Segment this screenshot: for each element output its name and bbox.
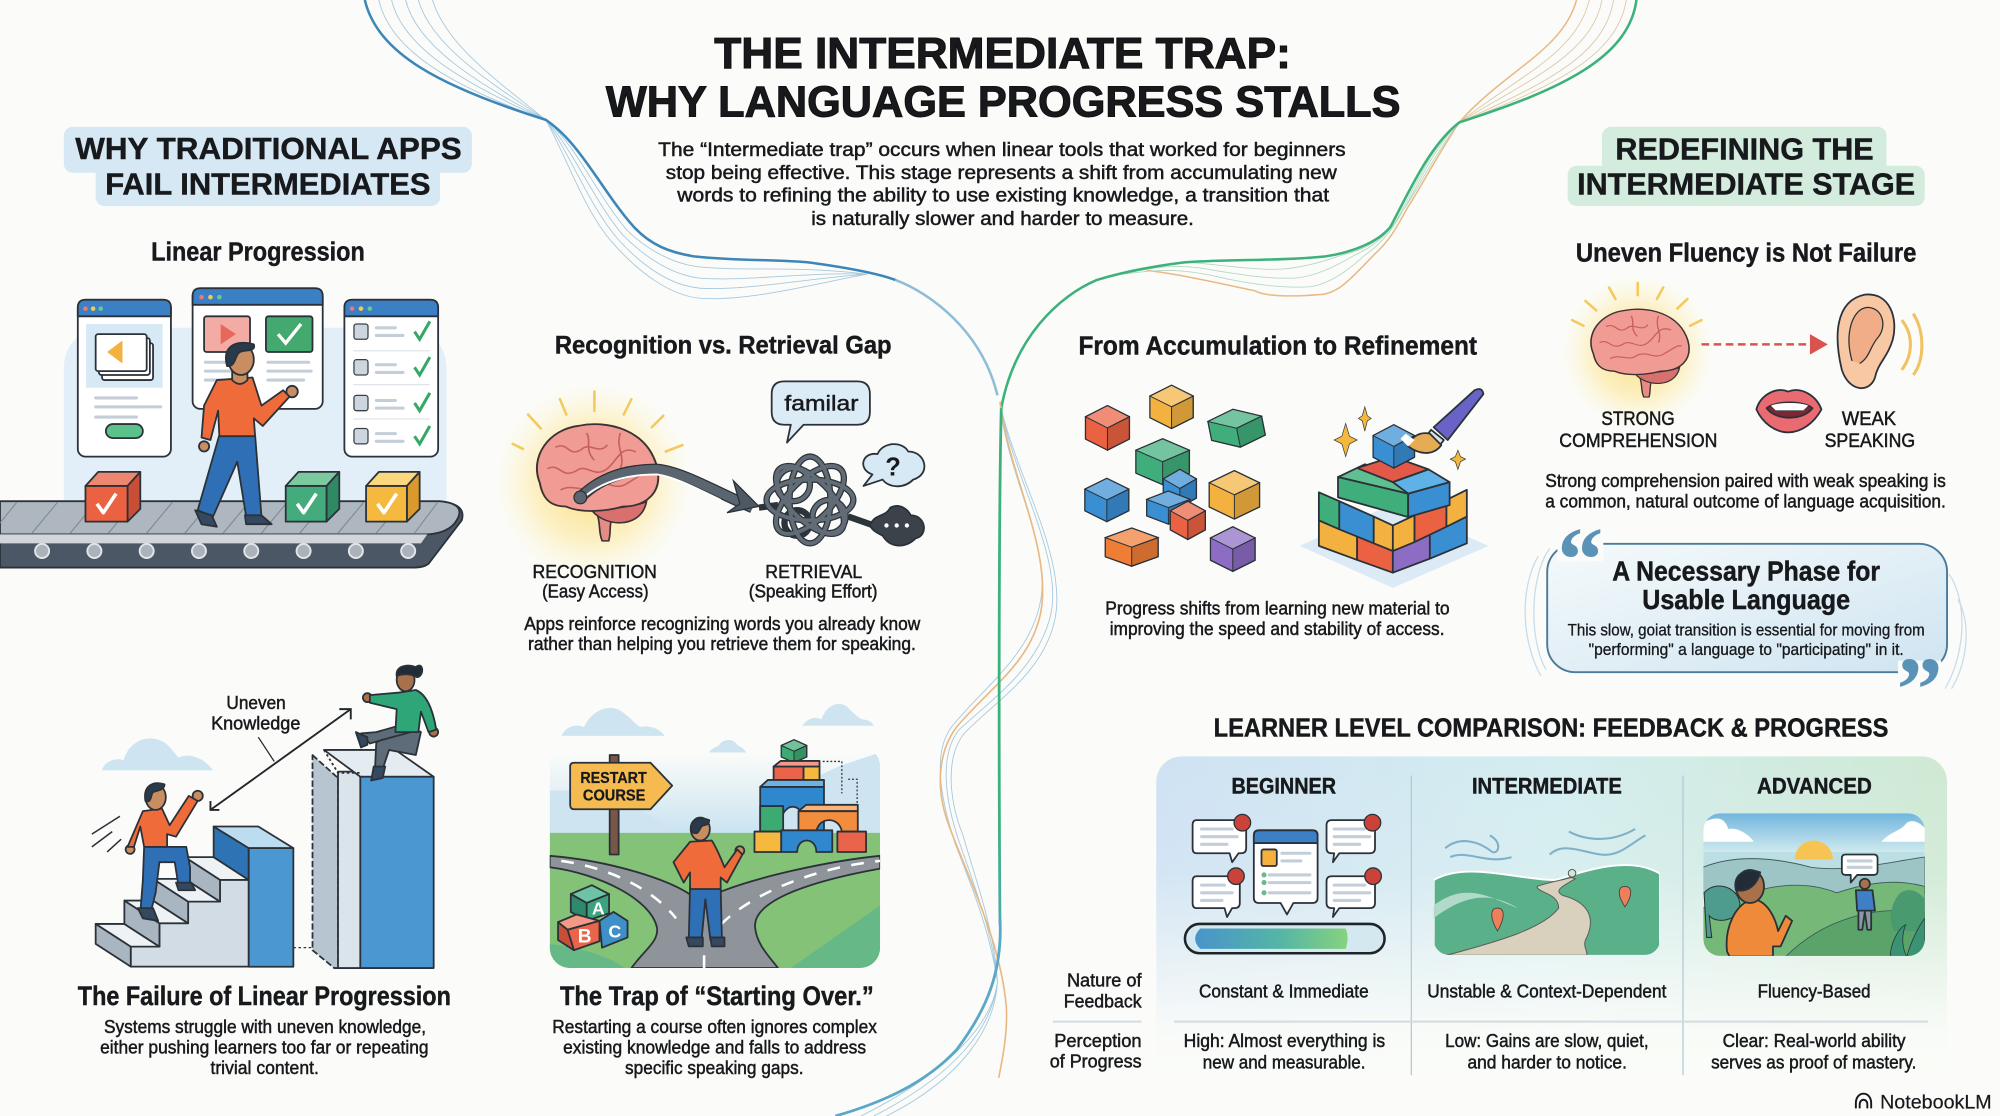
text: failure explanation: either pushing learners too far or repeating (100, 1037, 429, 1058)
label: uneven knowledge: Uneven (226, 692, 286, 713)
column headers: INTERMEDIATE (1472, 773, 1622, 798)
tall blue column (312, 750, 434, 968)
heading: learner level comparison: LEARNER LEVEL COMPARISON: FEEDBACK & PROGRESS (1214, 713, 1888, 743)
arrow: uneven knowledge (210, 709, 351, 810)
illustration: beginner feedback bubbles (1185, 814, 1385, 953)
row: perception of progress: High: Almost everything is (1184, 1030, 1385, 1051)
heading: trap of starting over: The Trap of “Starting Over.” (560, 981, 874, 1011)
back-view learner (1727, 870, 1792, 957)
abc blocks: C (608, 921, 621, 941)
text: strong comprehension explanation: a common, natural outcome of language acquisition. (1545, 491, 1946, 512)
table background (1156, 756, 1948, 1084)
labels: recognition and retrieval (533, 561, 878, 602)
text: strong comprehension explanation: Strong comprehension paired with weak speaking is (1545, 470, 1946, 491)
road (550, 856, 880, 968)
row: perception of progress: new and measurable. (1203, 1051, 1365, 1072)
labels: recognition and retrieval: (Easy Access) (542, 581, 649, 602)
intro paragraph (658, 140, 1346, 230)
abc blocks: B (578, 927, 592, 948)
icon: polishing brush (1401, 389, 1483, 453)
text: strong comprehension explanation (1545, 470, 1946, 512)
top cube (1373, 425, 1415, 468)
row: perception of progress: Low: Gains are slow, quiet, (1445, 1030, 1649, 1051)
heading: why traditional apps fail (64, 127, 472, 206)
signpost: RESTART (580, 770, 647, 787)
text: trap explanation (552, 1016, 878, 1078)
callout text (1568, 621, 1925, 659)
heading: why traditional apps fail: WHY TRADITIONAL APPS (75, 132, 462, 166)
text: recognition explanation (524, 613, 921, 654)
box: yellow (366, 472, 420, 522)
short blue column (214, 826, 293, 967)
abc blocks: A (592, 898, 605, 918)
intro paragraph: The “Intermediate trap” occurs when linear tools that worked for beginners (658, 140, 1346, 161)
text: trap explanation: existing knowledge and falls to address (563, 1037, 866, 1058)
text: failure explanation (100, 1016, 429, 1078)
icon: mouth (1756, 390, 1821, 432)
illustration: restart course crossroads (550, 704, 880, 968)
illustration: refined stacked blocks (1300, 389, 1489, 588)
jumping woman (356, 666, 438, 781)
row labels: of Progress (1050, 1050, 1142, 1071)
column headers (1232, 773, 1872, 798)
labels: recognition and retrieval: (Speaking Effort) (749, 581, 878, 602)
illustration: intermediate winding path (1434, 829, 1660, 957)
notebooklm logo: NotebookLM (1880, 1091, 1992, 1113)
conveyor belt (0, 501, 463, 568)
illustration: advanced landscape (1703, 812, 1926, 957)
row: nature of feedback: Fluency-Based (1758, 980, 1871, 1001)
quote mark close: ” (1897, 639, 1943, 741)
progress bar (1185, 924, 1385, 953)
text: trap explanation: Restarting a course often ignores complex (552, 1016, 878, 1037)
row labels: Feedback (1064, 990, 1142, 1011)
illustration: brain ear mouth (1561, 275, 1922, 432)
stairs (96, 857, 249, 967)
speech bubble: familar: familar (784, 391, 858, 416)
title: WHY LANGUAGE PROGRESS STALLS (606, 79, 1401, 127)
row: perception of progress: Clear: Real-world ability (1723, 1030, 1906, 1051)
arrow: recognition to retrieval (574, 469, 759, 513)
row: nature of feedback (1199, 980, 1871, 1001)
text: progress shifts: Progress shifts from learning new material to (1105, 598, 1450, 619)
flow lines: right green curve (1001, 0, 1636, 408)
column headers: ADVANCED (1757, 773, 1872, 798)
abc blocks (558, 885, 628, 950)
walking learner (195, 343, 298, 527)
intro paragraph: words to refining the ability to use existing knowledge, a transition that (676, 186, 1330, 207)
row labels: Perception (1054, 1030, 1142, 1051)
upper layer (1338, 477, 1408, 517)
labels: recognition and retrieval: RETRIEVAL (765, 561, 862, 582)
window: flashcards (78, 300, 171, 457)
labels: strong comprehension, weak speaking: COMPREHENSION (1559, 431, 1717, 452)
cloud (102, 738, 213, 770)
icon: tangled knot (759, 455, 874, 545)
labels: recognition and retrieval: RECOGNITION (533, 561, 657, 582)
illustration: conveyor and app windows (0, 288, 463, 568)
arrow: dashed red (1702, 334, 1828, 355)
text: failure explanation: trivial content. (210, 1057, 319, 1078)
callout heading: Usable Language (1642, 584, 1850, 615)
text: failure explanation: Systems struggle with uneven knowledge, (104, 1016, 426, 1037)
speech bubble (1842, 855, 1878, 883)
labels: strong comprehension, weak speaking: SPEAKING (1825, 431, 1915, 452)
heading: redefining the intermediate stage: REDEFINING THE (1615, 132, 1874, 166)
title (606, 30, 1401, 127)
clouds (561, 704, 874, 753)
row labels (1050, 970, 1142, 1071)
text: trap explanation: specific speaking gaps. (625, 1057, 804, 1078)
labels: strong comprehension, weak speaking (1559, 409, 1915, 452)
icon: brain (1591, 309, 1689, 397)
flow lines: central vertical bundle (835, 402, 1057, 1116)
illustration: recognition brain and tangled retrieval (494, 381, 924, 582)
column headers: BEGINNER (1232, 773, 1336, 798)
text: recognition explanation: Apps reinforce recognizing words you already know (524, 613, 921, 634)
speech bubble: familar (772, 381, 870, 443)
callout heading: A Necessary Phase for (1612, 555, 1880, 586)
base layer (1319, 520, 1357, 560)
comparison table (1050, 756, 1948, 1084)
title: THE INTERMEDIATE TRAP: (714, 30, 1291, 78)
heading: from accumulation to refinement: From Accumulation to Refinement (1078, 333, 1478, 361)
heading: redefining the intermediate stage: INTERMEDIATE STAGE (1577, 168, 1915, 202)
illustration: scattered blocks (1085, 385, 1267, 571)
row: perception of progress (1184, 1030, 1916, 1072)
backdrop (64, 328, 446, 505)
window: lessons (193, 288, 323, 409)
callout text: "performing" a language to "participating" in it. (1589, 640, 1904, 659)
box: red (85, 472, 140, 522)
heading: redefining the intermediate stage (1568, 127, 1925, 206)
climbing man (92, 783, 203, 921)
text: progress shifts: improving the speed and stability of access. (1110, 618, 1445, 639)
middle layer (1319, 492, 1339, 529)
heading: linear progression: Linear Progression (151, 239, 365, 267)
intro paragraph: is naturally slower and harder to measure. (811, 209, 1194, 230)
callout heading (1612, 555, 1880, 615)
heading: failure of linear progression: The Failure of Linear Progression (78, 981, 451, 1011)
thought cloud: question mark (863, 444, 924, 486)
heading: why traditional apps fail: FAIL INTERMEDIATES (105, 168, 430, 202)
distant speaker (1856, 879, 1875, 930)
callout text: This slow, goiat transition is essential for moving from (1568, 621, 1925, 640)
row labels: Nature of (1067, 970, 1142, 991)
labels: strong comprehension, weak speaking: STRONG (1601, 409, 1675, 430)
row: perception of progress: and harder to notice. (1467, 1051, 1627, 1072)
label: uneven knowledge: Knowledge (211, 712, 300, 733)
standing learner (673, 818, 744, 946)
text: progress shifts (1105, 598, 1450, 639)
window: checklist (344, 300, 438, 457)
labels: strong comprehension, weak speaking: WEAK (1842, 409, 1896, 430)
icon: brain (537, 424, 658, 541)
thought cloud: question mark: ? (885, 454, 901, 482)
label: uneven knowledge (211, 692, 300, 733)
row: perception of progress: serves as proof of mastery. (1711, 1051, 1916, 1072)
signpost (570, 755, 672, 855)
block tower (754, 740, 866, 852)
row: nature of feedback: Constant & Immediate (1199, 980, 1369, 1001)
row: nature of feedback: Unstable & Context-Dependent (1427, 980, 1666, 1001)
icon: ear (1838, 294, 1922, 388)
callout: necessary phase (1525, 509, 1966, 741)
thought cloud: ellipsis (870, 506, 924, 546)
quote mark open: “ (1557, 509, 1603, 611)
illustration: failure of linear progression (92, 666, 438, 968)
flow lines: left blue curve (365, 0, 997, 395)
intro paragraph: stop being effective. This stage represents a shift from accumulating new (666, 163, 1337, 184)
text: recognition explanation: rather than helping you retrieve them for speaking. (528, 633, 916, 654)
heading: recognition vs retrieval: Recognition vs. Retrieval Gap (555, 331, 892, 359)
heading: uneven fluency: Uneven Fluency is Not Failure (1576, 239, 1916, 267)
signpost: COURSE (583, 787, 645, 804)
sparkles (1334, 407, 1466, 469)
box: green (286, 472, 339, 522)
